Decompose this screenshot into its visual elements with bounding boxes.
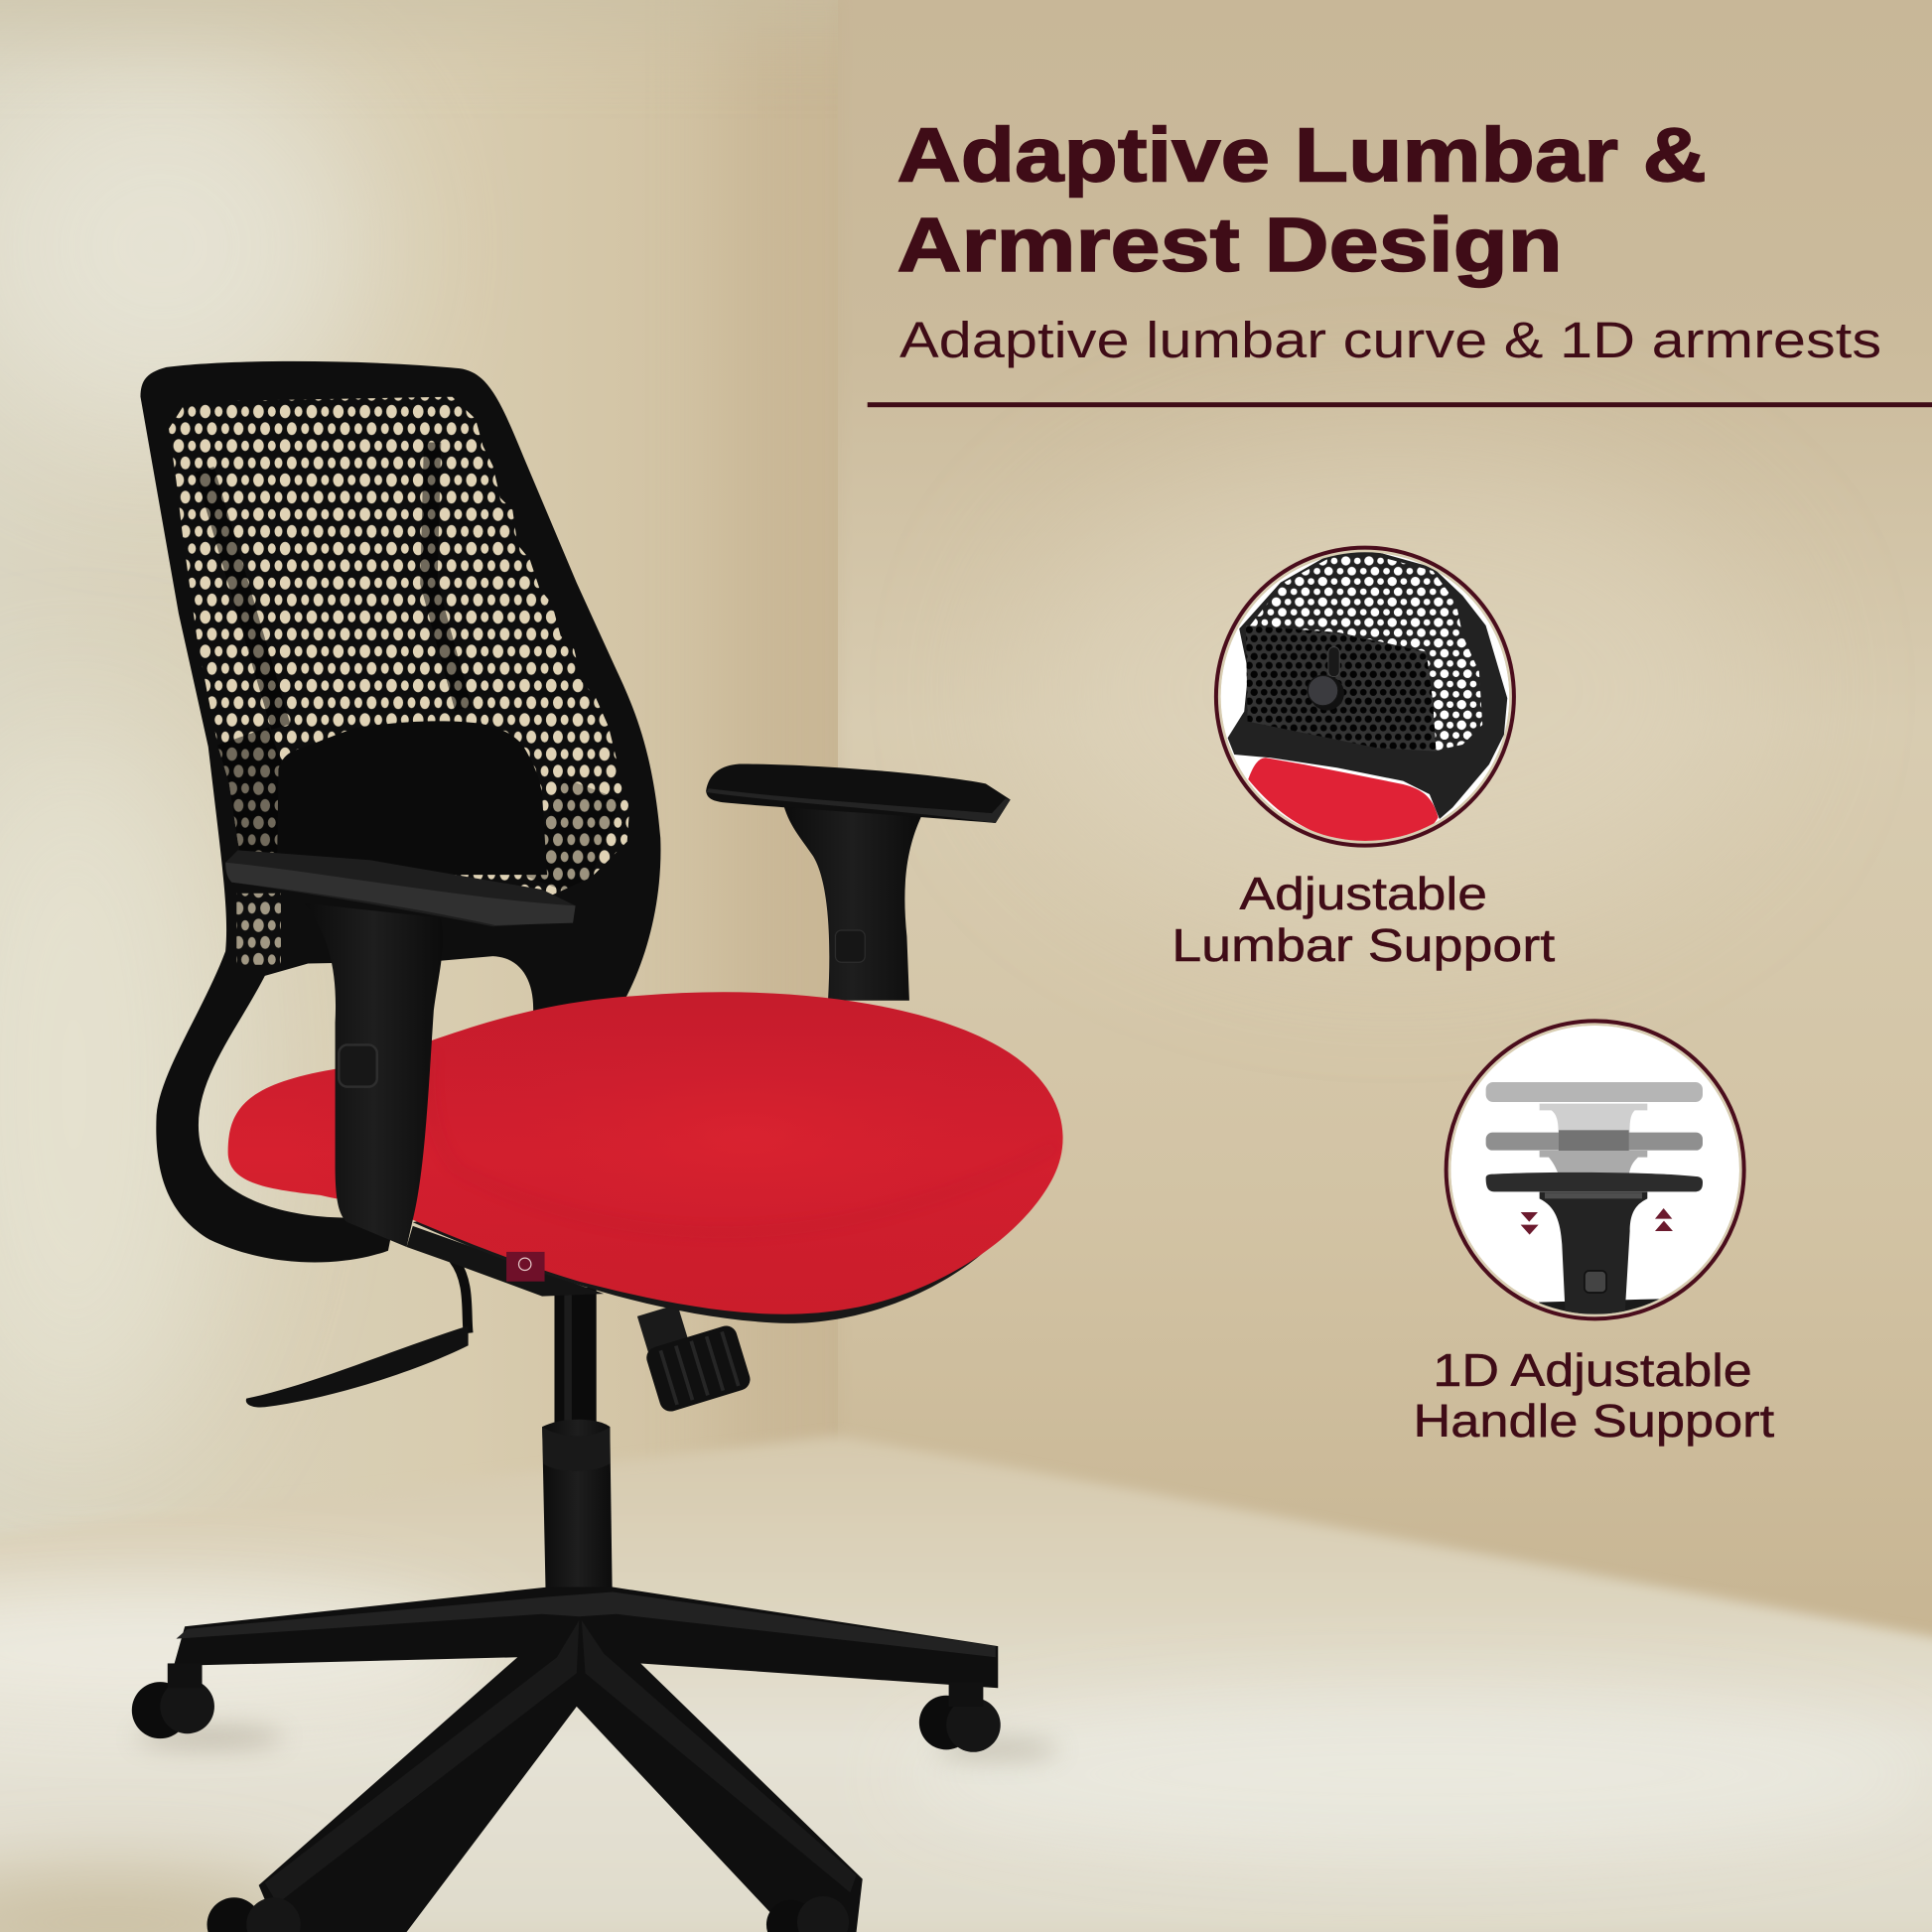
casters: [132, 1663, 1001, 1932]
armrest pad: [1486, 1173, 1703, 1191]
seat mechanism: [407, 1226, 604, 1297]
armrest post: [1540, 1192, 1647, 1313]
lumbar shell: [1228, 551, 1507, 819]
ghost armrest top: [1486, 1082, 1703, 1174]
arm button: [1585, 1271, 1606, 1293]
label: handle support: Handle Support: [1414, 1395, 1774, 1447]
title: [897, 112, 1707, 288]
inset: armrest adjustment: [1447, 1021, 1744, 1320]
height lever: [246, 1259, 469, 1408]
label: handle support: [1414, 1344, 1774, 1447]
label: handle support: 1D Adjustable: [1433, 1344, 1752, 1396]
lumbar pad: [277, 721, 547, 875]
down arrows: [1521, 1212, 1539, 1235]
base column: [542, 1288, 613, 1601]
seat: [228, 992, 1063, 1323]
title: Armrest Design: [897, 203, 1563, 288]
label: lumbar support: [1172, 868, 1556, 971]
label: lumbar support: Lumbar Support: [1172, 919, 1556, 971]
subtitle: Adaptive lumbar curve & 1D armrests: [899, 312, 1881, 368]
red seat: [1248, 758, 1439, 844]
up arrows: [1655, 1208, 1673, 1231]
tilt knob: [633, 1290, 753, 1414]
caster shadows: [136, 1726, 1059, 1759]
brand tag: [506, 1252, 545, 1282]
lower mesh behind armrest: [236, 894, 281, 965]
label: lumbar support: Adjustable: [1240, 868, 1487, 919]
left armrest: [225, 850, 576, 1247]
inner panel: [1246, 625, 1437, 752]
chair: [132, 361, 1063, 1932]
inset: lumbar support: [1216, 548, 1514, 846]
mesh inner frame shadow: [205, 443, 592, 888]
ghost armrest middle: [1486, 1130, 1703, 1174]
title: Adaptive Lumbar &: [897, 112, 1707, 198]
base frame: [1539, 1299, 1661, 1320]
mesh holes: [160, 394, 640, 911]
lumbar knob: [1308, 647, 1344, 711]
star base: [174, 1587, 998, 1932]
right armrest: [706, 763, 1011, 1001]
backrest shell: [140, 361, 660, 1262]
